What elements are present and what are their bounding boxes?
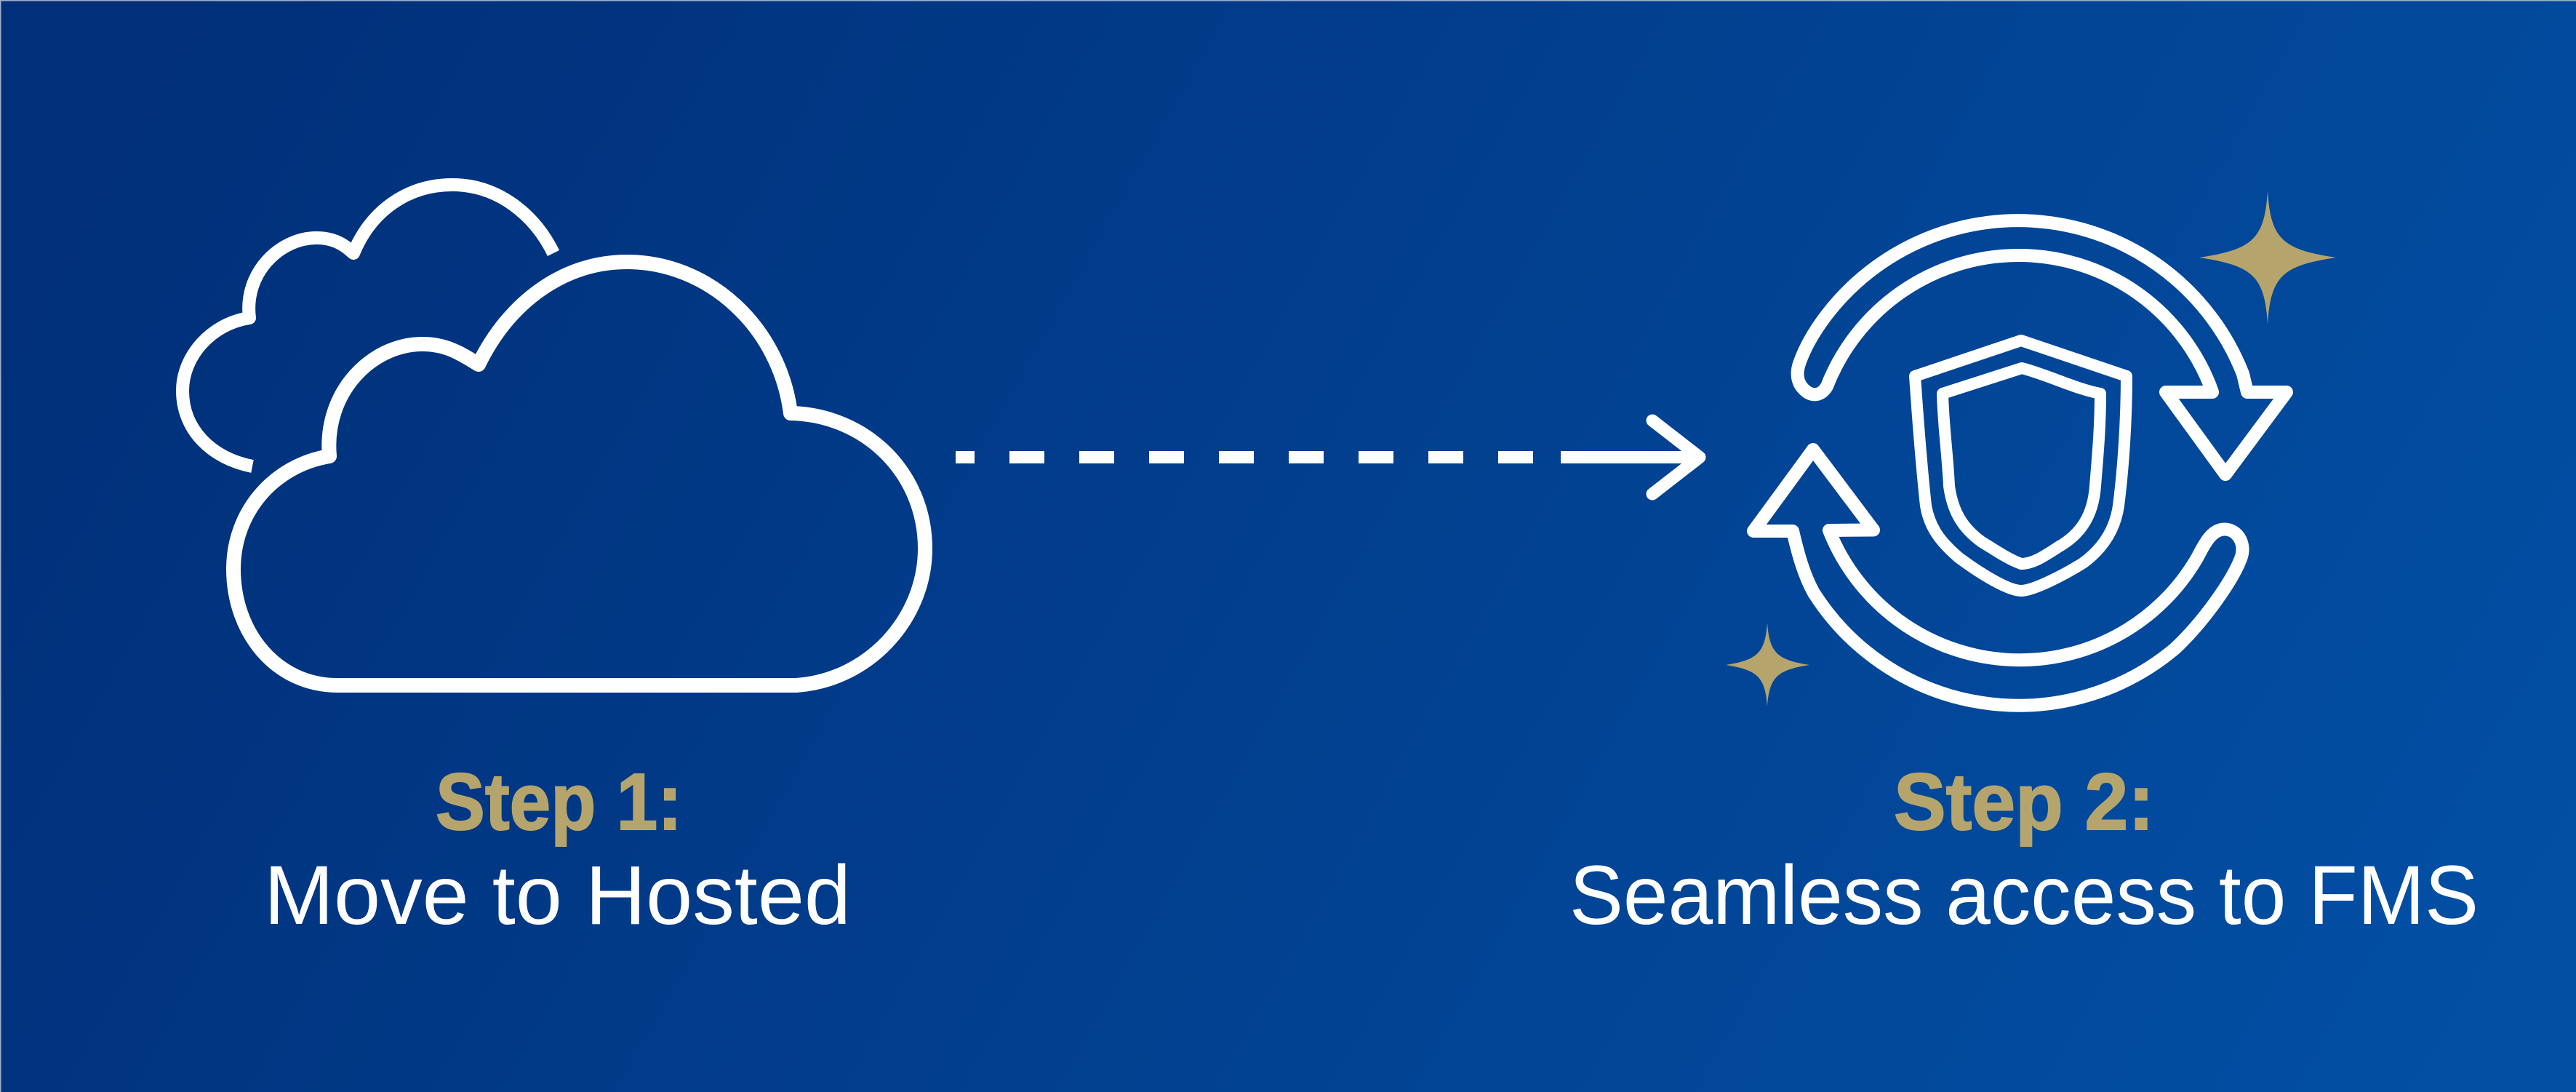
step 1 description: Move to Hosted — [264, 849, 851, 942]
top cycle arrow — [1798, 220, 2287, 474]
icon: cycle arrows with shield — [1753, 220, 2287, 706]
step 2 description: Seamless access to FMS — [1569, 849, 2479, 942]
bottom cycle arrow — [1753, 450, 2242, 706]
shield inner — [1943, 368, 2100, 564]
back cloud — [183, 185, 553, 466]
step 1 label — [264, 757, 851, 942]
dashed arrow — [956, 421, 1700, 494]
front cloud — [233, 262, 925, 685]
shield outer — [1915, 340, 2127, 591]
step 2 label — [1569, 757, 2479, 942]
icon: large gold sparkle — [2199, 191, 2336, 324]
icon: clouds — [183, 185, 925, 685]
icon: small gold sparkle — [1726, 623, 1809, 706]
step 1 heading: Step 1: — [436, 757, 682, 847]
step 2 heading: Step 2: — [1894, 757, 2154, 847]
